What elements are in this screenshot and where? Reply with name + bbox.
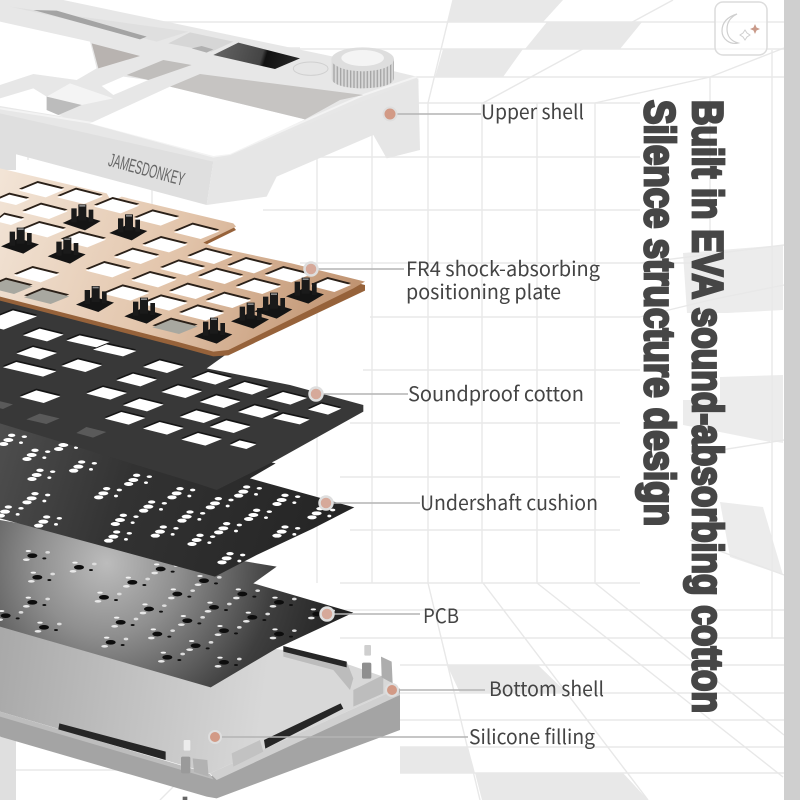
label: upper shell: Upper shell	[481, 96, 584, 125]
logo text: JAMESDONKEY	[106, 149, 187, 190]
standoffs and tabs	[181, 645, 393, 800]
arrow buttons	[293, 62, 328, 75]
label: FR4 shock-absorbing positioning plate: positioning plate	[406, 276, 561, 305]
volume knob	[331, 47, 394, 88]
undershaft cushion plate	[0, 400, 354, 577]
bottom shell	[0, 597, 400, 800]
label: bottom shell: Bottom shell	[489, 673, 604, 702]
screen	[213, 43, 300, 69]
marker: silicone filling	[209, 731, 221, 743]
marker: bottom shell	[386, 684, 398, 696]
soundproof cotton plate	[0, 298, 363, 490]
label: undershaft cushion: Undershaft cushion	[420, 487, 598, 516]
label: FR4 shock-absorbing positioning plate	[406, 253, 600, 305]
marker: undershaft cushion	[320, 496, 332, 510]
marker: FR4 plate	[304, 262, 318, 276]
label: soundproof cotton: Soundproof cotton	[408, 378, 584, 407]
key switches	[1, 204, 324, 344]
silicone filling strips	[58, 646, 347, 760]
label: silicone filling: Silicone filling	[469, 721, 595, 750]
vertical heading: line two: Silence structure design	[635, 100, 683, 526]
leader lines	[215, 114, 485, 737]
PCB plate	[0, 520, 353, 687]
label: PCB: PCB	[423, 600, 459, 629]
marker: upper shell	[384, 108, 396, 120]
marker: PCB	[320, 608, 334, 620]
upper shell	[0, 0, 420, 205]
icon: moon and stars badge	[715, 2, 767, 55]
frame windows	[0, 22, 305, 156]
FR4 positioning plate	[0, 168, 365, 356]
marker: soundproof cotton	[310, 388, 322, 400]
label: FR4 shock-absorbing positioning plate: FR4 shock-absorbing	[406, 253, 600, 282]
